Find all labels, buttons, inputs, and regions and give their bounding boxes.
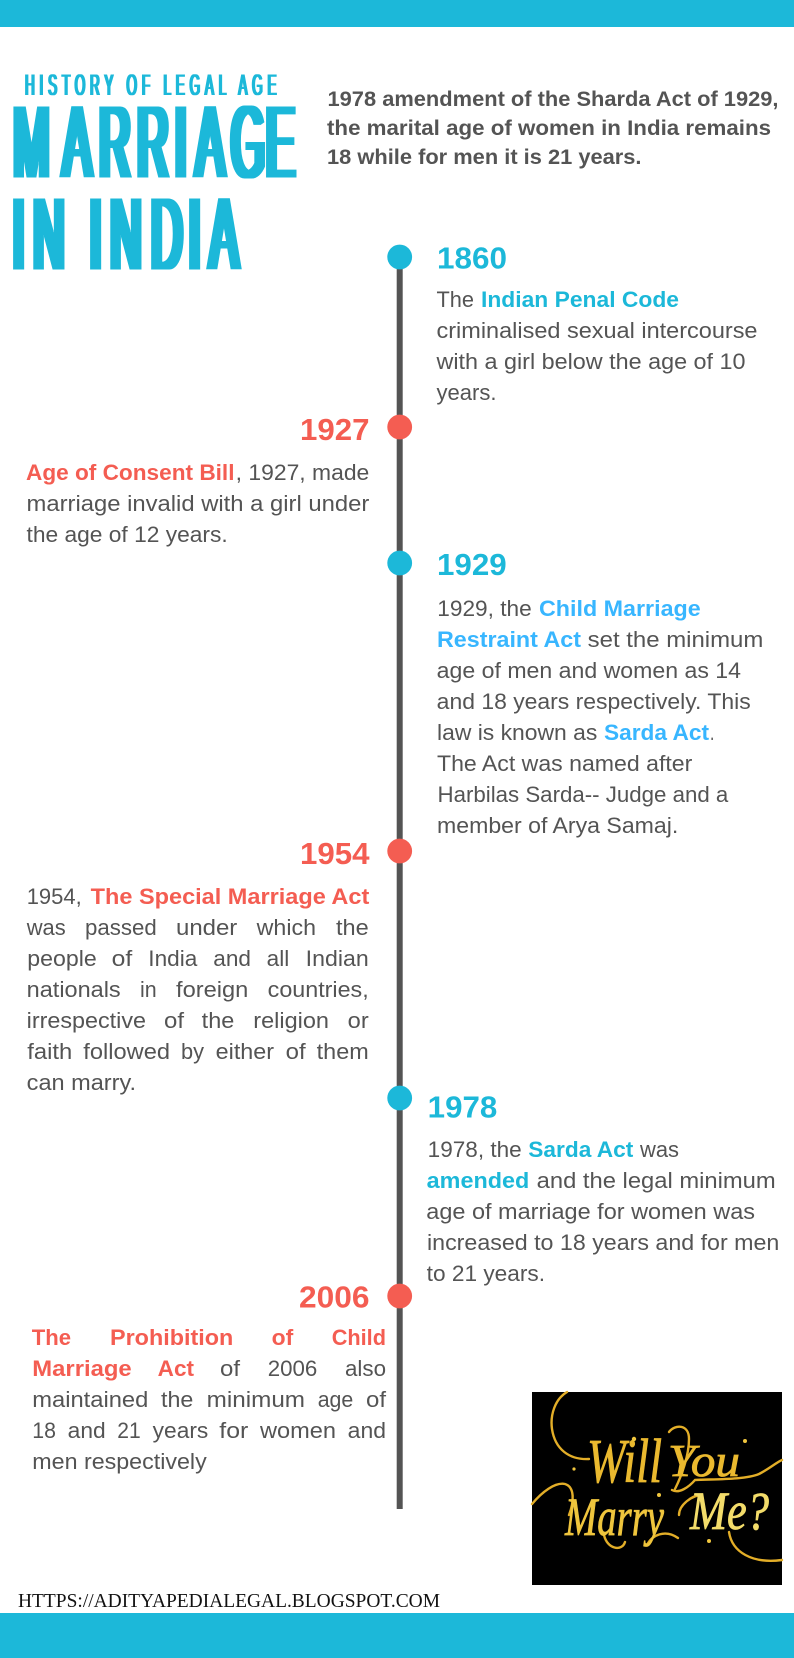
description 2006: for [219,1418,249,1443]
description 1954: foreign [176,977,248,1002]
heading line 1: MARRIAGE [13,84,295,200]
year 1954: 1954 [300,836,370,871]
description 1954: all [267,946,289,971]
description 1929: and 18 years respectively. This [437,689,751,714]
description 2006: 2006 [268,1356,317,1381]
description 2006: the [161,1387,193,1412]
illustration: Will You Marry Me: You [668,1435,740,1486]
panel: 1860 [387,240,758,405]
description 1954: was [26,915,66,940]
marker 1929 [387,551,412,575]
source url: HTTPS://ADITYAPEDIALEGAL.BLOGSPOT.COM [18,1591,440,1612]
description 1929: member of Arya Samaj. [437,813,678,838]
description 1860: The [436,287,474,312]
intro text: 1978 amendment of the Sharda Act of 1929, [328,88,778,111]
description 1860 [435,287,758,405]
description 2006: minimum [207,1387,305,1412]
description 1954: Indian [306,946,369,971]
description 1929 [437,596,763,838]
description 1954: the [336,915,369,940]
intro text [327,88,778,169]
description 1954: under [176,915,238,940]
description 2006: men respectively [32,1449,208,1474]
description 1954: nationals [27,977,121,1002]
year 1860: 1860 [437,240,507,275]
intro text: the marital age of women in India remains [327,117,771,140]
description 2006: Marriage [32,1356,132,1381]
description 2006: Act [158,1356,195,1381]
description 1954: and [213,946,251,971]
description 2006: of [366,1387,387,1412]
description 1978: and the legal minimum [537,1168,776,1193]
description 2006: also [345,1356,386,1381]
marker 2006 [387,1284,412,1308]
description 2006: of [220,1356,241,1381]
title [13,68,295,291]
description 1954: the [202,1008,234,1033]
marker 1860 [387,245,412,269]
panel: 1978 [387,1086,779,1286]
description 1927: , 1927, made [236,460,369,485]
description 2006: Prohibition [110,1325,233,1350]
description 1978 [426,1137,779,1286]
description 1978: 1978, the [428,1137,522,1162]
description 1954: faith [27,1039,72,1064]
description 1978: to 21 years. [427,1261,545,1286]
description 1929: . [710,720,714,745]
description 1954: countries, [268,977,369,1002]
description 1927 [26,460,370,547]
description 1978: amended [427,1168,529,1193]
description 1954: people [27,946,97,971]
description 2006: age [318,1387,353,1412]
marker 1954 [387,839,412,863]
description 1929: Child Marriage [539,596,701,621]
description 2006: 21 [117,1418,141,1443]
description 1929: Harbilas Sarda-- Judge and a [438,782,729,807]
illustration: Will You Marry Me: Marry [564,1487,664,1547]
description 1954: irrespective [27,1008,146,1033]
description 1929: The Act was named after [437,751,693,776]
description 2006: and [68,1418,106,1443]
description 2006: women [259,1418,336,1443]
illustration: Will You Marry Me: Me? [689,1481,769,1541]
description 1929: 1929, the [437,596,532,621]
description 1954: in [140,977,157,1002]
timeline axis [397,257,403,1509]
description 1978: age of marriage for women was [426,1199,755,1224]
description 1929: set the minimum [588,627,763,652]
description 1927: Age of Consent Bill [26,460,235,485]
intro text: 18 while for men it is 21 years. [327,146,642,169]
description 2006: Child [332,1325,386,1350]
description 1929: Sarda Act [604,720,710,745]
description 1860: Indian Penal Code [481,287,679,312]
description 1954: religion [253,1008,329,1033]
description 1954: by [181,1039,205,1064]
description 1927: the age of 12 years. [26,522,228,547]
description 1954: passed [85,915,157,940]
description 1954 [26,884,370,1095]
description 2006 [32,1325,387,1474]
description 1929: age of men and women as 14 [437,658,741,683]
panel: 1927 [26,412,412,547]
description 1954: of [164,1008,185,1033]
marker 1927 [387,415,412,439]
description 1978: was [639,1137,679,1162]
subtitle: HISTORY OF LEGAL AGE [25,68,281,101]
panel: 2006 [32,1280,412,1474]
description 1954: either [216,1039,275,1064]
description 1954: which [256,915,316,940]
top bar [0,0,794,27]
description 1954: of [112,946,133,971]
description 1860: criminalised sexual intercourse [436,318,758,343]
description 1954: followed [83,1039,170,1064]
bottom bar [0,1613,794,1658]
description 1954: The Special Marriage Act [91,884,370,909]
description 1954: them [317,1039,369,1064]
description 1954: or [348,1008,369,1033]
panel: 1929 [387,547,763,838]
marker 1978 [387,1086,412,1110]
description 2006: of [272,1325,294,1350]
year 1929: 1929 [437,547,507,582]
panel: 1954 [26,836,412,1095]
description 1929: Restraint Act [437,627,582,652]
description 2006: and [348,1418,386,1443]
description 1978: increased to 18 years and for men [427,1230,779,1255]
description 2006: years [153,1418,208,1443]
heading line 2: IN INDIA [13,175,239,291]
description 1954: can marry. [27,1070,136,1095]
description 1978: Sarda Act [528,1137,634,1162]
description 2006: maintained [32,1387,148,1412]
illustration: Will You Marry Me [532,1392,782,1585]
description 1954: 1954, [27,884,82,909]
description 1954: India [148,946,198,971]
description 1860: with a girl below the age of 10 [435,349,746,374]
description 1929: law is known as [437,720,597,745]
description 1860: years. [436,380,496,405]
description 1927: marriage invalid with a girl under [26,491,370,516]
description 2006: The [32,1325,71,1350]
description 1954: of [286,1039,307,1064]
year 2006: 2006 [299,1280,370,1315]
illustration: Will You Marry Me: Will [587,1428,662,1496]
year 1978: 1978 [428,1090,497,1125]
description 2006: 18 [32,1418,56,1443]
year 1927: 1927 [300,412,370,447]
